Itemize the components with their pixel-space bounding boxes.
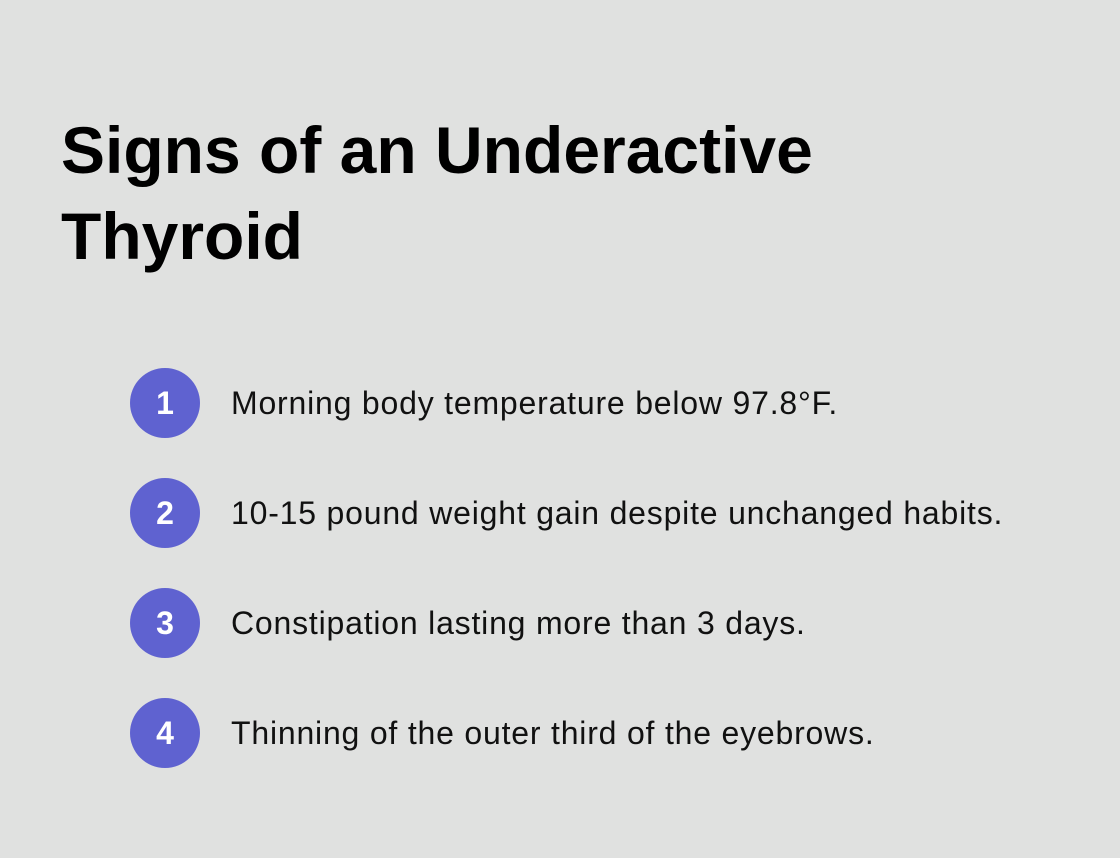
text 3: Constipation lasting more than 3 days. <box>231 605 806 641</box>
item 4 <box>130 698 875 768</box>
badge 3: 3 <box>156 605 174 641</box>
item 3 <box>130 588 806 658</box>
item 2 <box>130 478 1003 548</box>
text 2: 10-15 pound weight gain despite unchanged habits. <box>231 495 1003 531</box>
badge 4: 4 <box>156 715 174 751</box>
title <box>61 113 813 273</box>
title: Signs of an Underactive <box>61 113 813 187</box>
text 4: Thinning of the outer third of the eyebrows. <box>231 715 875 751</box>
badge 1: 1 <box>156 385 174 421</box>
badge 2: 2 <box>156 495 174 531</box>
badge 4 <box>130 698 200 768</box>
title: Thyroid <box>61 199 303 273</box>
text 1: Morning body temperature below 97.8°F. <box>231 385 838 421</box>
badge 1 <box>130 368 200 438</box>
badge 3 <box>130 588 200 658</box>
badge 2 <box>130 478 200 548</box>
item 1 <box>130 368 838 438</box>
